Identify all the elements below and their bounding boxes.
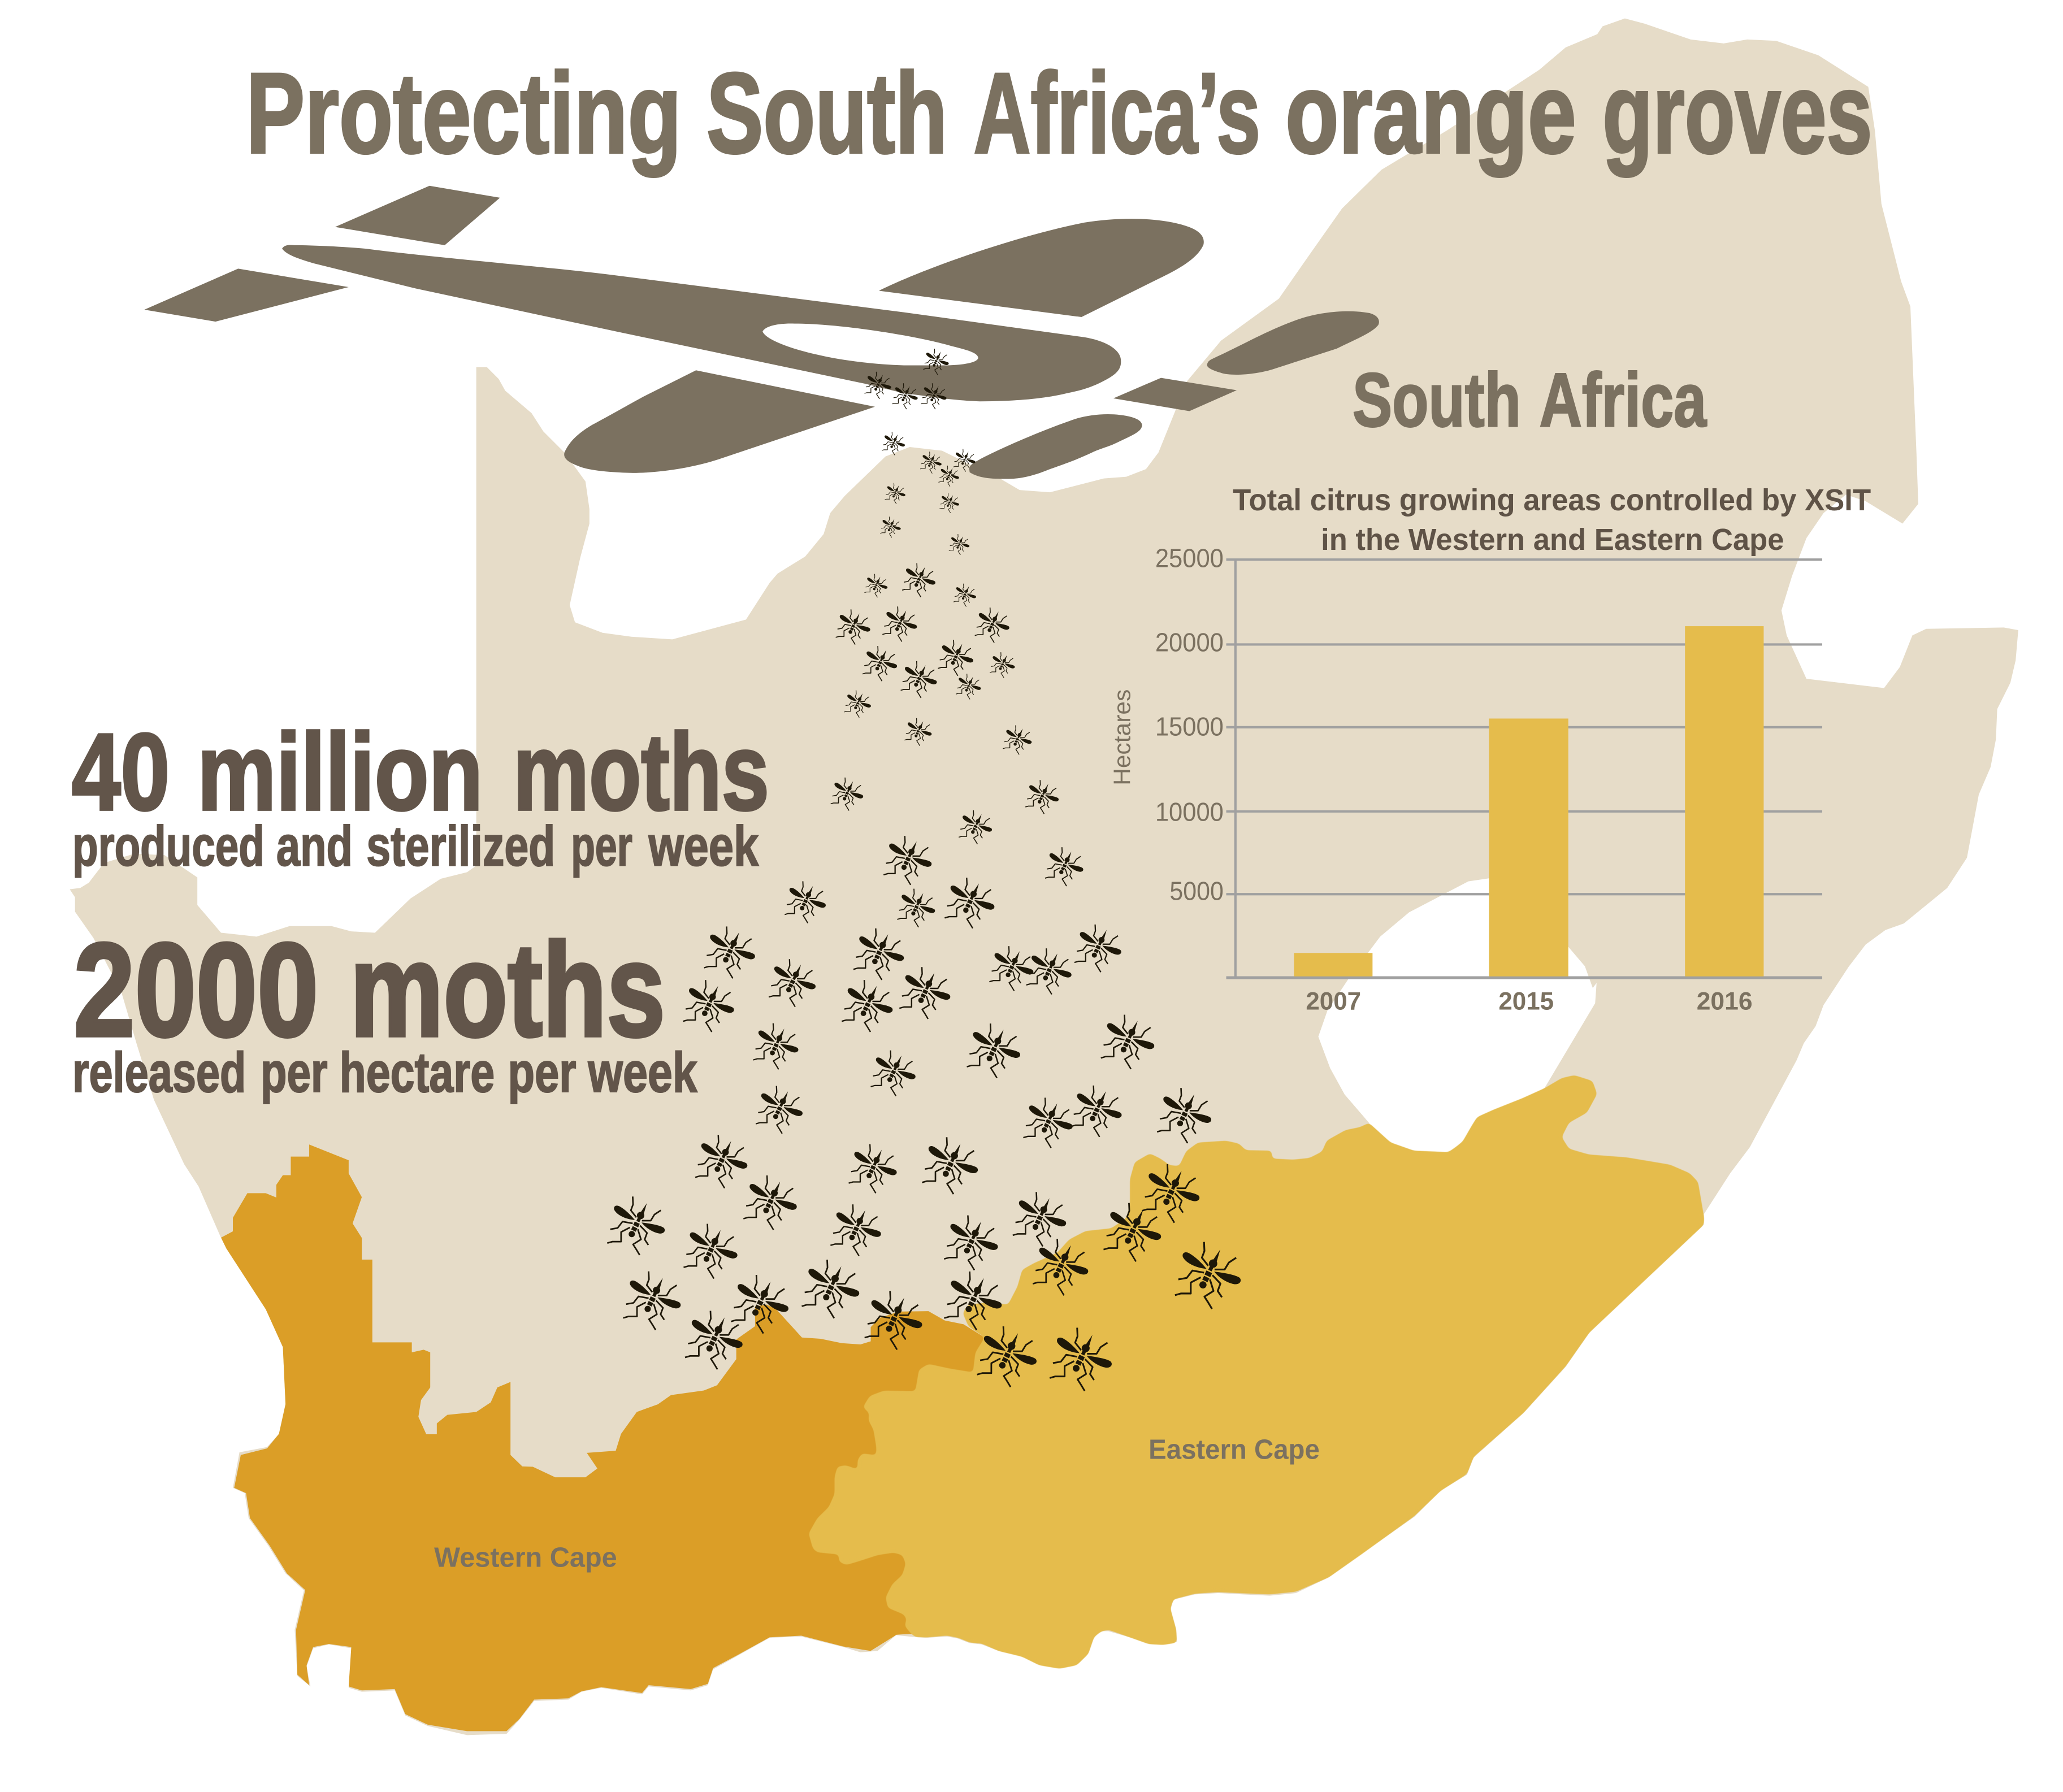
y axis labels: 20000 bbox=[1155, 627, 1224, 657]
stat caption: released per hectare: per bbox=[261, 1041, 328, 1104]
stat: 2000 moths bbox=[73, 915, 665, 1064]
propeller hub bbox=[1113, 378, 1237, 411]
stat caption: produced and sterilized: and bbox=[276, 815, 353, 878]
bar 2015 bbox=[1489, 718, 1568, 977]
stat: 2000 moths: moths bbox=[350, 915, 665, 1064]
x axis labels: 2016 bbox=[1697, 988, 1753, 1016]
title: Protecting bbox=[246, 49, 682, 177]
bar chart bbox=[1109, 543, 1822, 1016]
propeller blade upper bbox=[1207, 311, 1379, 375]
propeller blade lower bbox=[969, 414, 1142, 479]
title: Africa’s bbox=[974, 49, 1260, 177]
stat caption: produced and sterilized bbox=[72, 815, 759, 878]
upper tail fin bbox=[335, 186, 500, 245]
label: Western Cape: Western Cape bbox=[434, 1542, 617, 1573]
heading: South Africa bbox=[1353, 357, 1707, 442]
lower wing bbox=[564, 370, 875, 473]
stat caption: produced and sterilized: produced bbox=[72, 815, 265, 878]
stat: 40 million moths: million bbox=[197, 711, 483, 833]
region: Western Cape bbox=[221, 1144, 1000, 1731]
heading: South Africa: Africa bbox=[1540, 357, 1707, 442]
y axis labels bbox=[1155, 543, 1224, 905]
y axis labels: 25000 bbox=[1155, 543, 1224, 572]
lower tail fin bbox=[144, 268, 349, 322]
bar 2016 bbox=[1685, 626, 1763, 977]
stat: 40 million moths: 40 bbox=[72, 711, 170, 833]
stat caption: produced and sterilized: week bbox=[648, 815, 759, 878]
x axis labels: 2007 bbox=[1306, 988, 1361, 1016]
title: South bbox=[707, 49, 947, 177]
y axis labels: 5000 bbox=[1169, 876, 1224, 905]
stat caption: released per hectare: released bbox=[72, 1041, 246, 1104]
upper wing bbox=[879, 219, 1204, 317]
region: Eastern Cape bbox=[809, 1075, 1704, 1669]
stat: 40 million moths bbox=[72, 711, 769, 833]
stat caption: produced and sterilized: per bbox=[571, 815, 632, 878]
stat caption: released per hectare bbox=[72, 1041, 697, 1104]
stat caption: released per hectare: per bbox=[508, 1041, 577, 1104]
x axis labels bbox=[1306, 988, 1753, 1016]
bar 2007 bbox=[1294, 953, 1372, 977]
title: groves bbox=[1602, 49, 1872, 177]
stat caption: produced and sterilized: sterilized bbox=[366, 815, 555, 878]
x axis labels: 2015 bbox=[1498, 988, 1554, 1016]
chart title bbox=[1233, 484, 1871, 557]
stat caption: released per hectare: hectare bbox=[340, 1041, 495, 1104]
chart title: in the Western and Eastern Cape bbox=[1321, 523, 1784, 557]
title: orange bbox=[1285, 49, 1576, 177]
moth swarm bbox=[607, 349, 1241, 1391]
stat: 2000 moths: 2000 bbox=[73, 915, 318, 1064]
stat: 40 million moths: moths bbox=[513, 711, 769, 833]
chart title: Total citrus growing areas controlled by XSIT bbox=[1233, 484, 1871, 517]
heading: South Africa: South bbox=[1353, 357, 1521, 442]
icon: airplane bbox=[144, 186, 1379, 479]
y axis labels: 15000 bbox=[1155, 711, 1224, 741]
stat caption: released per hectare: week bbox=[588, 1041, 697, 1104]
label: Eastern Cape: Eastern Cape bbox=[1148, 1435, 1320, 1465]
y axis labels: 10000 bbox=[1155, 797, 1224, 827]
fuselage bbox=[282, 245, 1121, 401]
y axis title: Hectares bbox=[1109, 689, 1135, 786]
title bbox=[246, 49, 1872, 177]
